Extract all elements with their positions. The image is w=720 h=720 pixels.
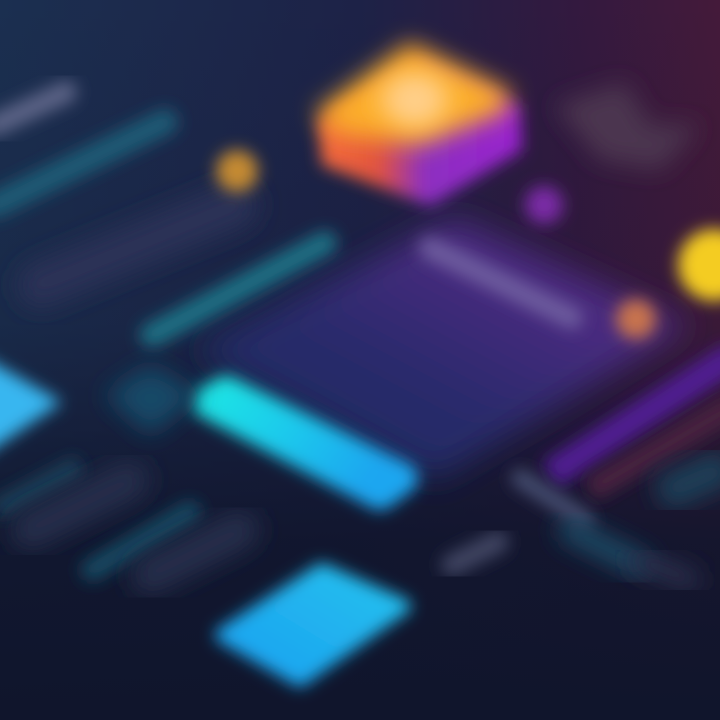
bar: grey lower right (520, 478, 585, 520)
shape: blue left edge (0, 355, 62, 458)
icon: orange dot on panel (616, 299, 656, 339)
bar: teal lower right (570, 530, 640, 565)
icon: yellow dot (678, 229, 720, 301)
panel: central purple card (195, 218, 690, 480)
bar: cyan main (208, 392, 402, 494)
bar: dim lower right (640, 560, 690, 580)
bar: grey top left (0, 92, 66, 125)
icon: orange dot (216, 150, 258, 192)
bar: grey small (452, 542, 498, 565)
icon: glowing cube (315, 42, 522, 206)
panel: dim shape top right (555, 82, 700, 170)
bar: teal lower middle (92, 512, 190, 570)
bar: teal centre (152, 243, 325, 335)
bar: dim teal right (660, 465, 720, 495)
bar: lilac on panel (430, 248, 572, 318)
bar: maroon stripe right (590, 405, 720, 490)
bar: dim lower left (30, 480, 130, 530)
icon: purple dot (525, 186, 563, 224)
bar: teal lower left (0, 465, 80, 510)
bar: teal top left (0, 122, 165, 205)
shape: blue parallelogram (222, 570, 404, 680)
bar: dim upper left (40, 205, 235, 285)
shape: teal dim block left (105, 365, 200, 435)
bar: purple stripe right (550, 355, 720, 475)
bar: dim lower middle (150, 530, 240, 575)
